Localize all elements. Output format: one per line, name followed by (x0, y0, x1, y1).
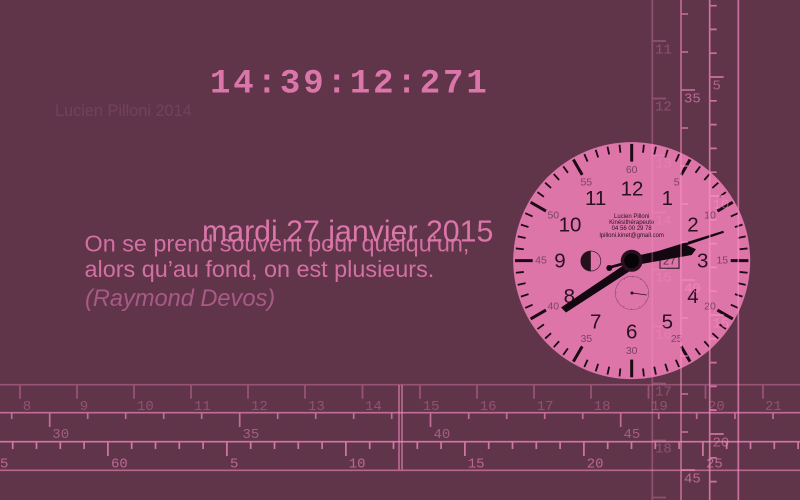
quote (84, 231, 469, 312)
minute hand (561, 265, 630, 312)
horizontal ruler: hours: 14 (365, 399, 382, 415)
horizontal ruler: seconds: 25 (706, 457, 723, 473)
horizontal ruler: seconds: 60 (111, 457, 128, 473)
vertical ruler: hours: 16 (655, 328, 672, 344)
horizontal ruler: minutes: 35 (242, 427, 259, 443)
hour numerals: 11 (585, 187, 606, 210)
business card text (599, 214, 664, 239)
vertical ruler: seconds: 15 (712, 316, 729, 332)
hour numerals: 8 (564, 285, 575, 308)
minute numerals: 55 (580, 176, 592, 188)
vertical ruler: hours: 13 (655, 156, 672, 172)
vertical ruler: hours: 11 (655, 42, 672, 58)
minute numerals: 25 (671, 333, 683, 345)
horizontal ruler: seconds: 5 (0, 457, 8, 473)
minute numerals: 30 (626, 345, 638, 357)
vertical ruler: minutes: 40 (684, 282, 701, 298)
horizontal ruler: hours (0, 385, 800, 415)
horizontal ruler: hours: 13 (308, 399, 325, 415)
minute numerals: 60 (626, 164, 638, 176)
business card text: lpilloni.kinet@gmail.com (599, 233, 664, 239)
date window (660, 253, 679, 268)
small seconds subdial (615, 276, 649, 310)
quote: (Raymond Devos) (85, 286, 275, 312)
hour hand (640, 245, 696, 264)
author credit: Lucien Pilloni 2014 (55, 102, 192, 120)
clock (513, 142, 750, 379)
hour numerals (554, 178, 708, 343)
vertical ruler: seconds: 10 (712, 198, 729, 214)
hour numerals: 3 (697, 249, 708, 272)
hour numerals: 12 (621, 178, 643, 200)
business card text: Lucien Pilloni (614, 214, 649, 220)
horizontal ruler: seconds: 15 (468, 457, 485, 473)
hour numerals: 6 (626, 320, 637, 343)
date: mardi 27 janvier 2015 (202, 216, 493, 249)
quote: On se prend souvent pour quelqu’un, (84, 231, 469, 257)
hour numerals: 1 (662, 187, 673, 210)
horizontal ruler: hours: 9 (80, 399, 88, 415)
minute numerals: 15 (716, 255, 728, 267)
moon phase icon (581, 251, 601, 271)
second hand (606, 231, 724, 271)
centre hub (621, 250, 643, 272)
horizontal ruler: hours: 21 (765, 399, 782, 415)
horizontal ruler: hours: 11 (194, 399, 211, 415)
business card text: Kinésithérapeute (609, 220, 655, 226)
vertical ruler: seconds: 20 (712, 436, 729, 452)
hour numerals: 10 (559, 214, 581, 236)
vertical ruler: hours: 15 (655, 270, 672, 286)
horizontal ruler: seconds (0, 442, 800, 473)
hour numerals: 7 (590, 310, 601, 334)
hour numerals: 5 (662, 310, 673, 334)
minute numerals: 40 (547, 300, 559, 312)
minute numerals: 10 (704, 210, 716, 222)
horizontal ruler: minutes: 30 (52, 427, 69, 443)
horizontal ruler: hours: 15 (423, 399, 440, 415)
hour numerals: 4 (687, 285, 699, 308)
horizontal ruler: hours: 12 (251, 399, 268, 415)
horizontal ruler: hours: 18 (594, 399, 611, 415)
horizontal ruler: hours: 17 (537, 399, 554, 415)
minute and hour tick marks (515, 144, 748, 377)
quote: alors qu’au fond, on est plusieurs. (84, 256, 434, 282)
horizontal ruler: hours: 20 (708, 399, 725, 415)
business card text: 04 56 00 29 78 (612, 226, 652, 232)
minute numerals: 45 (535, 255, 547, 267)
horizontal ruler: seconds: 5 (230, 457, 238, 473)
vertical plain line (737, 0, 739, 500)
vertical ruler: minutes: 45 (684, 472, 701, 488)
horizontal ruler: minutes (0, 413, 800, 443)
vertical ruler: hours: 18 (655, 442, 672, 458)
horizontal ruler: seconds: 20 (587, 457, 604, 473)
horizontal ruler: hours: 10 (137, 399, 154, 415)
vertical ruler: hours: 12 (655, 100, 672, 116)
horizontal ruler: minutes: 45 (624, 427, 640, 443)
vertical ruler: seconds: 5 (712, 78, 721, 94)
horizontal ruler: seconds: 10 (349, 457, 366, 473)
horizontal ruler: minutes: 40 (434, 427, 450, 443)
minute numerals: 35 (580, 333, 592, 345)
minute numerals: 5 (674, 176, 680, 188)
minute numerals (535, 164, 728, 357)
vertical ruler: seconds (710, 0, 729, 500)
date window: 27 (663, 256, 676, 268)
vertical ruler: minutes (681, 0, 701, 500)
hour numerals: 2 (687, 214, 699, 236)
digital time: 14:39:12:271 (210, 65, 490, 103)
minute numerals: 20 (704, 300, 716, 312)
horizontal ruler: hours: 16 (480, 399, 497, 415)
vertical ruler: hours (652, 0, 672, 500)
vertical ruler: hours: 14 (655, 214, 672, 230)
horizontal ruler: hours: 8 (23, 399, 31, 415)
horizontal ruler: hours: 19 (651, 399, 668, 415)
horizontal baseline and centre markers (0, 385, 800, 470)
vertical ruler: minutes: 35 (684, 92, 701, 108)
hour numerals: 9 (554, 249, 566, 272)
minute numerals: 50 (547, 210, 559, 222)
clock face (513, 142, 750, 379)
vertical ruler: hours: 17 (655, 384, 672, 400)
